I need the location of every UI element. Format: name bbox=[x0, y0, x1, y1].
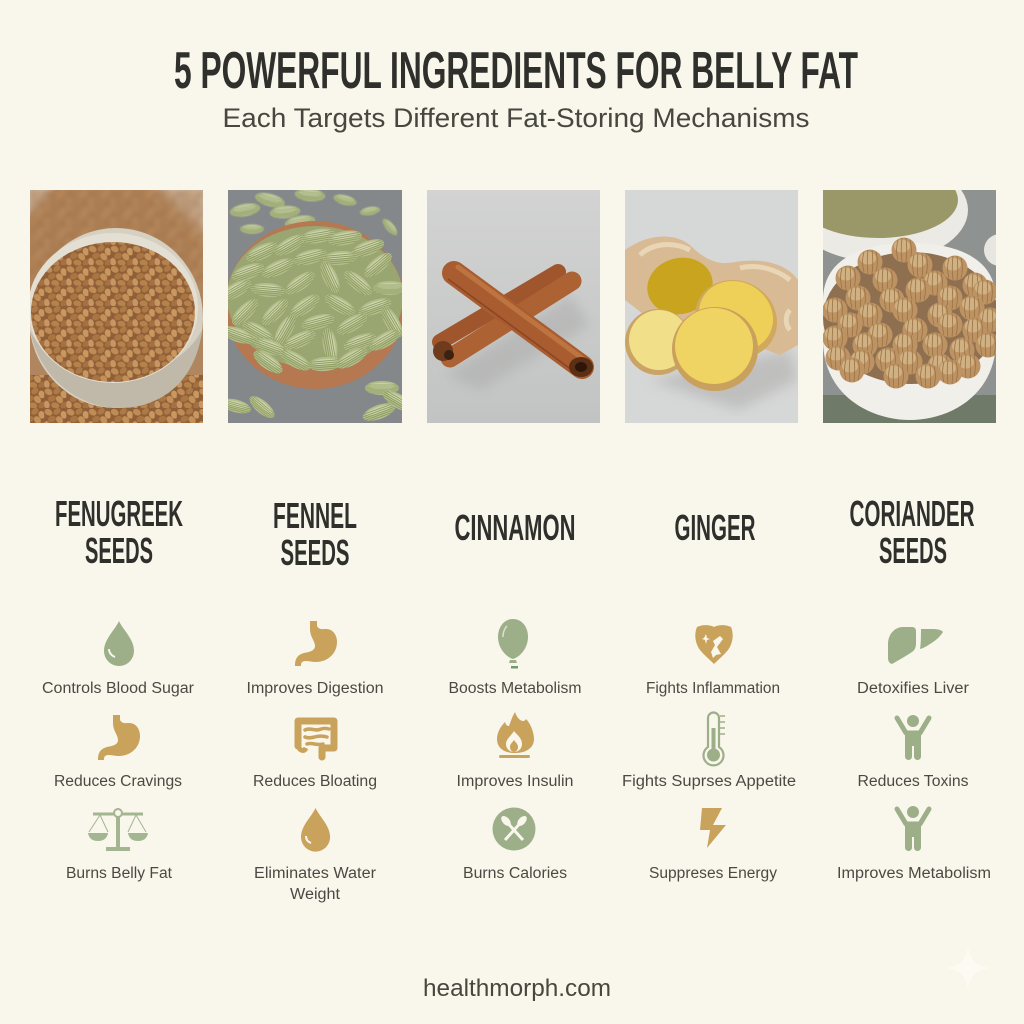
subtitle: Each Targets Different Fat-Storing Mechanisms bbox=[222, 103, 810, 133]
benefit: reduces cravings bbox=[54, 715, 182, 790]
icon: balance scale bbox=[88, 809, 148, 849]
benefit: reduces toxins bbox=[858, 715, 969, 790]
photo: ginger root with slices bbox=[625, 190, 798, 423]
benefit: eliminates water weight: Weight bbox=[290, 886, 341, 903]
column: fennel seeds bbox=[246, 495, 384, 903]
benefit: burns belly fat bbox=[66, 809, 173, 882]
benefit: improves insulin bbox=[456, 712, 574, 790]
benefit: reduces toxins: Reduces Toxins bbox=[858, 773, 969, 790]
heading: coriander seeds: SEEDS bbox=[879, 530, 947, 571]
heading: fennel seeds: FENNEL bbox=[273, 495, 357, 536]
benefit: reduces cravings: Reduces Cravings bbox=[54, 773, 182, 790]
benefit: burns belly fat: Burns Belly Fat bbox=[66, 865, 173, 882]
heading: coriander seeds bbox=[850, 493, 974, 571]
benefit: detoxifies liver: Detoxifies Liver bbox=[857, 680, 969, 697]
benefit: reduces bloating bbox=[253, 721, 377, 790]
benefit: detoxifies liver bbox=[857, 627, 969, 697]
icon: balloon bbox=[498, 619, 528, 668]
benefit: improves digestion: Improves Digestion bbox=[246, 680, 384, 697]
benefit: fights inflammation bbox=[646, 625, 780, 697]
column: coriander seeds bbox=[837, 493, 991, 882]
benefit: fights suprses appetite: Fights Suprses Appetite bbox=[622, 773, 796, 790]
benefit: burns calories: Burns Calories bbox=[463, 865, 567, 882]
icon: stomach bbox=[295, 621, 337, 666]
icon: lightning bolt bbox=[700, 808, 726, 848]
benefit: suppreses energy: Suppreses Energy bbox=[649, 865, 777, 882]
heading: fenugreek seeds bbox=[55, 493, 183, 571]
benefit: boosts metabolism bbox=[448, 619, 582, 697]
column: fenugreek seeds bbox=[42, 493, 194, 882]
icon: intestines bbox=[298, 721, 334, 757]
heading: ginger: GINGER bbox=[674, 507, 756, 548]
photo: coriander seeds in white bowl bbox=[823, 190, 996, 423]
icon: person with arms raised bbox=[897, 715, 929, 760]
icon: green drop bbox=[104, 621, 134, 666]
icon: thermometer bbox=[704, 712, 725, 765]
icon: heart shield bbox=[695, 625, 733, 664]
benefit: controls blood sugar bbox=[42, 621, 194, 697]
photo: cinnamon sticks bbox=[427, 190, 600, 423]
heading: fennel seeds bbox=[273, 495, 357, 573]
benefit: improves metabolism bbox=[837, 806, 991, 882]
icon: stomach bbox=[98, 715, 140, 760]
column: cinnamon bbox=[448, 507, 582, 882]
footer url: healthmorph.com bbox=[423, 975, 611, 1002]
photo: fenugreek seeds in bowl bbox=[30, 190, 203, 423]
heading: fennel seeds: SEEDS bbox=[280, 532, 350, 573]
benefit: fights suprses appetite bbox=[622, 712, 796, 790]
icon: gold drop bbox=[301, 808, 330, 852]
benefit: improves digestion bbox=[246, 621, 384, 697]
benefit: fights inflammation: Fights Inflammation bbox=[646, 680, 780, 697]
benefit: reduces bloating: Reduces Bloating bbox=[253, 773, 377, 790]
sparkle watermark bbox=[946, 946, 990, 990]
column: ginger bbox=[622, 507, 796, 882]
benefit: burns calories bbox=[463, 808, 567, 882]
heading: fenugreek seeds: SEEDS bbox=[85, 530, 153, 571]
benefit: eliminates water weight: Eliminates Water bbox=[254, 865, 376, 882]
photo: fennel seeds in terracotta bowl bbox=[228, 190, 402, 423]
benefit: eliminates water weight bbox=[254, 808, 376, 903]
benefit: improves metabolism: Improves Metabolism bbox=[837, 865, 991, 882]
benefit: improves insulin: Improves Insulin bbox=[456, 773, 574, 790]
benefit: suppreses energy bbox=[649, 808, 777, 882]
benefit: controls blood sugar: Controls Blood Sugar bbox=[42, 680, 194, 697]
icon: person with arms raised bbox=[897, 806, 929, 851]
icon: liver bbox=[888, 627, 943, 664]
heading: fenugreek seeds: FENUGREEK bbox=[55, 493, 183, 534]
heading: cinnamon: CINNAMON bbox=[454, 507, 576, 548]
icon: crossed utensils in circle bbox=[492, 808, 536, 850]
icon: flame bbox=[497, 712, 534, 758]
benefit: boosts metabolism: Boosts Metabolism bbox=[448, 680, 582, 697]
